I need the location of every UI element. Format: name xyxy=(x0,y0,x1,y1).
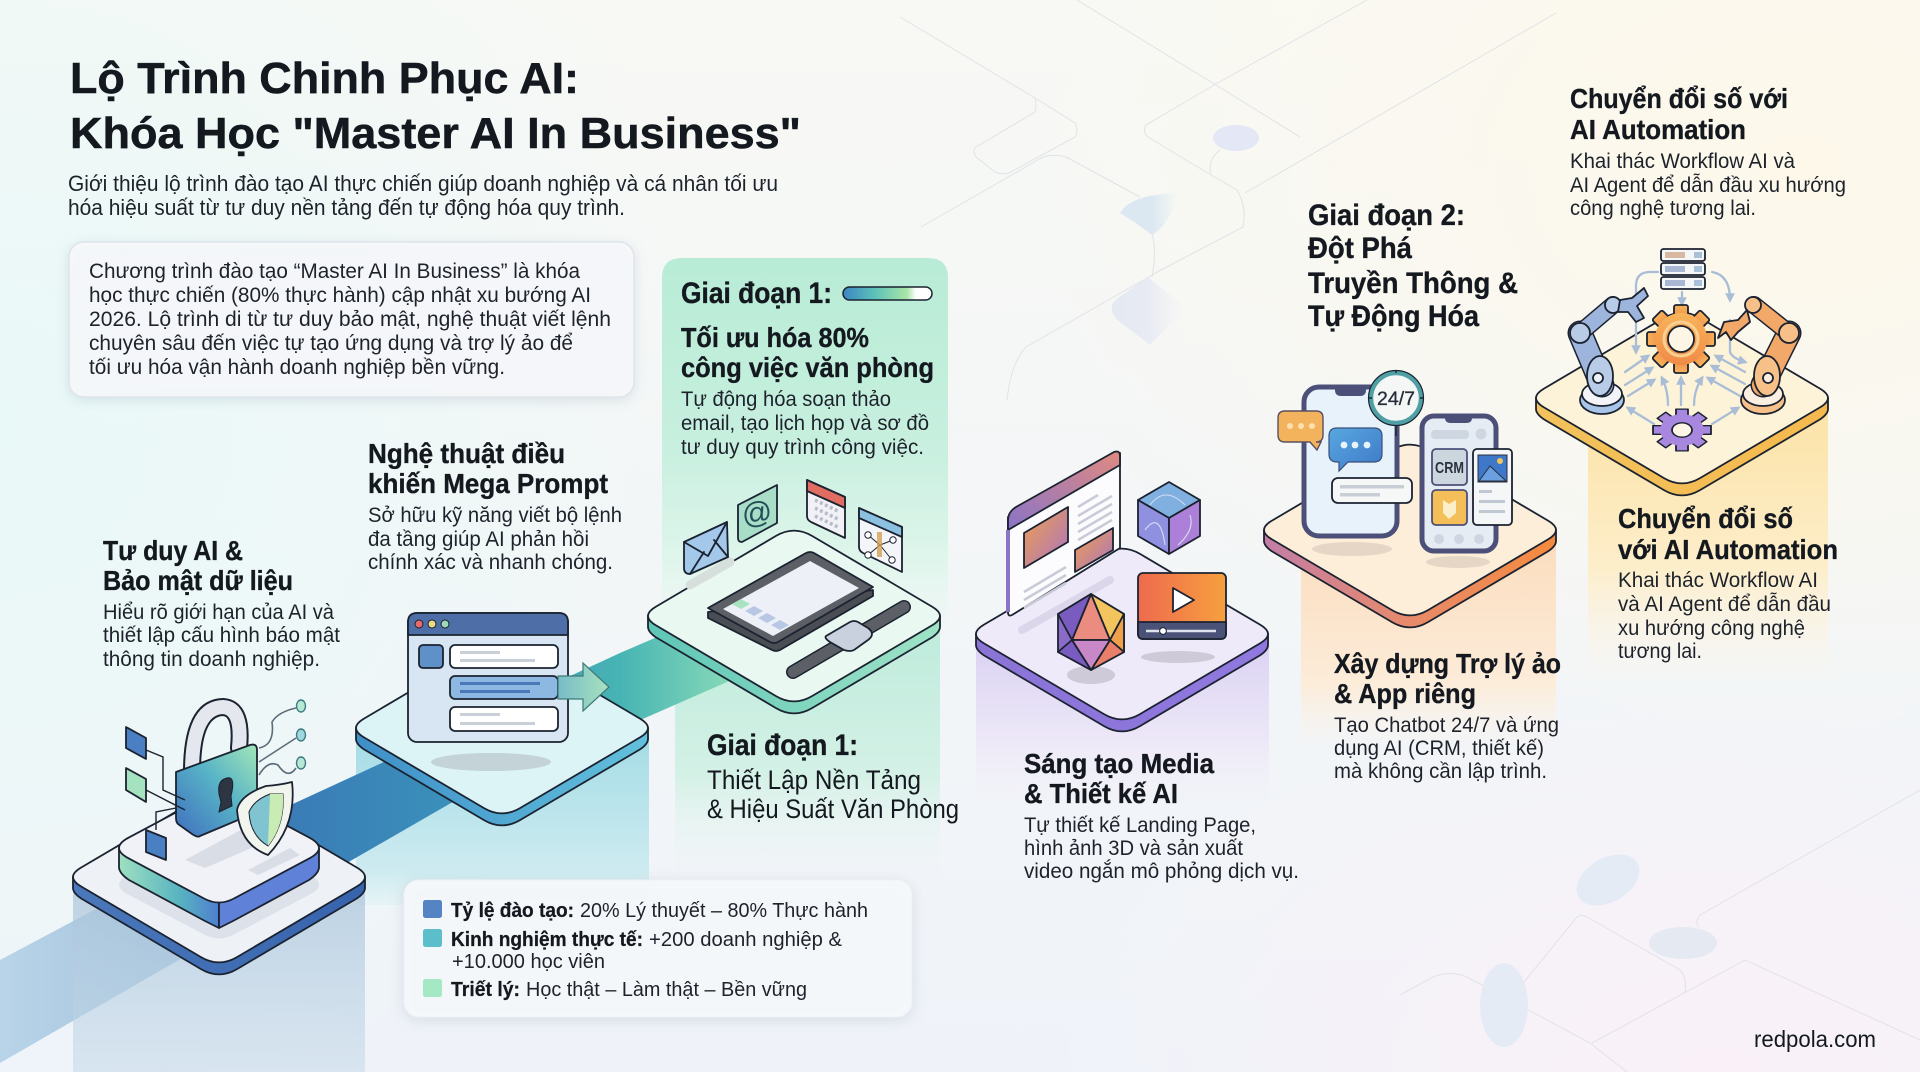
platform: office tablet xyxy=(648,531,940,713)
text: automation top block: Chuyển đổi số với xyxy=(1570,83,1788,114)
subtitle: hóa hiệu suất từ tư duy nền tảng đến tự động hóa quy trình. xyxy=(68,195,625,220)
heading: stage 1 optimise office work: Giai đoạn 1: xyxy=(681,277,832,310)
title xyxy=(70,54,801,158)
diagonal progress ribbon xyxy=(0,610,760,1063)
icon: blue robot arm xyxy=(1570,288,1648,414)
text: automation top block: công nghệ tương lai. xyxy=(1570,197,1756,220)
column: chatbot xyxy=(1301,530,1556,750)
website credit: redpola.com xyxy=(1754,1026,1876,1052)
text: security step: thông tin doanh nghiệp. xyxy=(103,648,320,671)
text: stage 1 foundation: & Hiệu Suất Văn Phòng xyxy=(707,794,959,824)
text: stage 1 foundation xyxy=(707,729,959,824)
legend item: philosophy: Học thật – Làm thật – Bền vững xyxy=(526,979,807,1001)
icon: phones, chat bubbles and 24/7 clock xyxy=(1278,370,1512,568)
text: security step: thiết lập cấu hình báo mật xyxy=(103,624,340,647)
text: stage 2 heading xyxy=(1308,199,1518,333)
text: automation top block: AI Agent để dẫn đầu xu hướng xyxy=(1570,174,1846,197)
text: security step: Tư duy AI & xyxy=(103,535,243,566)
text: automation top block: AI Automation xyxy=(1570,114,1746,145)
column: media xyxy=(976,634,1269,820)
text: stage 1 foundation: Giai đoạn 1: xyxy=(707,729,858,762)
text: media step: video ngắn mô phỏng dịch vụ. xyxy=(1024,860,1299,883)
icon: phones, chat bubbles and 24/7 clock: 24/7 xyxy=(1377,389,1415,410)
text: automation lower block: xu hướng công nghệ xyxy=(1618,617,1805,640)
title: Lộ Trình Chinh Phục AI: xyxy=(70,54,579,103)
text: virtual assistant step: Xây dựng Trợ lý ảo xyxy=(1334,648,1561,679)
icon: landing page, cube, gem and video xyxy=(1008,452,1226,684)
heading: stage 1 optimise office work: tư duy quy trình công việc. xyxy=(681,436,924,459)
text: media step: Tự thiết kế Landing Page, xyxy=(1024,814,1256,837)
text: virtual assistant step xyxy=(1334,648,1561,783)
text: automation lower block: Chuyển đổi số xyxy=(1618,503,1793,534)
platform: security xyxy=(73,792,365,974)
platform: mega prompt xyxy=(356,643,648,825)
text: stage 2 heading: Đột Phá xyxy=(1308,232,1412,265)
background circuit pattern xyxy=(900,0,1920,1072)
text: security step: Bảo mật dữ liệu xyxy=(103,565,293,596)
text: automation lower block: Khai thác Workflow AI xyxy=(1618,569,1818,592)
text: prompt step: Sở hữu kỹ năng viết bộ lệnh xyxy=(368,504,622,527)
text: media step: & Thiết kế AI xyxy=(1024,778,1178,809)
icon: tablet, watch and office apps: @ xyxy=(740,495,774,532)
legend item: training ratio xyxy=(423,900,868,922)
panel: legend card xyxy=(404,880,912,1017)
heading: stage 1 optimise office work: email, tạo lịch họp và sơ đồ xyxy=(681,412,929,435)
legend item: training ratio: 20% Lý thuyết – 80% Thực hành xyxy=(580,900,868,922)
panel: program intro card: học thực chiến (80% thực hành) cập nhật xu bướng AI xyxy=(89,284,591,307)
text: stage 2 heading: Giai đoạn 2: xyxy=(1308,199,1465,232)
text: media step xyxy=(1024,748,1299,883)
text: automation top block xyxy=(1570,83,1846,220)
subtitle xyxy=(68,171,778,220)
panel: program intro card: tối ưu hóa vận hành doanh nghiệp bền vững. xyxy=(89,356,505,379)
heading: stage 1 optimise office work: công việc văn phòng xyxy=(681,352,934,383)
column: security xyxy=(73,885,365,1072)
text: media step: Sáng tạo Media xyxy=(1024,748,1214,779)
legend item: experience xyxy=(423,929,843,973)
text: security step xyxy=(103,535,340,671)
legend item: experience: +200 doanh nghiệp & xyxy=(649,929,843,951)
text: prompt step: đa tầng giúp AI phản hồi xyxy=(368,528,589,551)
column: automation xyxy=(1588,398,1828,685)
text: stage 2 heading: Truyền Thông & xyxy=(1308,267,1518,300)
legend item: experience: Kinh nghiệm thực tế: xyxy=(451,929,643,951)
text: virtual assistant step: & App riêng xyxy=(1334,678,1476,709)
panel: program intro card xyxy=(69,242,634,397)
icon: phones, chat bubbles and 24/7 clock: CRM xyxy=(1435,460,1464,477)
platform: media xyxy=(976,549,1268,731)
text: stage 2 heading: Tự Động Hóa xyxy=(1308,300,1479,333)
legend item: training ratio: Tỷ lệ đào tạo: xyxy=(451,900,574,922)
text: prompt step: chính xác và nhanh chóng. xyxy=(368,551,613,574)
column: mega prompt xyxy=(356,735,649,905)
panel: program intro card: 2026. Lộ trình di từ tư duy bảo mật, nghệ thuật viết lệnh xyxy=(89,308,611,331)
text: virtual assistant step: dụng AI (CRM, thiết kế) xyxy=(1334,737,1544,760)
text: security step: Hiểu rõ giới hạn của AI và xyxy=(103,601,334,624)
icon: orange robot arm xyxy=(1718,297,1799,414)
platform: chatbot xyxy=(1264,445,1556,627)
legend item: experience: +10.000 học viên xyxy=(452,951,605,973)
text: virtual assistant step: mà không cần lập trình. xyxy=(1334,760,1547,783)
heading: stage 1 optimise office work xyxy=(681,277,934,459)
text: media step: hình ảnh 3D và sản xuất xyxy=(1024,837,1243,860)
legend item: philosophy: Triết lý: xyxy=(451,979,520,1001)
heading: stage 1 optimise office work: Tối ưu hóa 80% xyxy=(681,322,869,353)
panel: program intro card: chuyên sâu đến việc tự tạo ứng dụng và trợ lý ảo để xyxy=(89,332,573,355)
text: prompt step: Nghệ thuật điều xyxy=(368,438,565,469)
text: automation lower block: với AI Automation xyxy=(1618,534,1838,565)
icon: padlock and shield xyxy=(119,700,319,938)
panel: stage 1 green highlight xyxy=(662,258,948,640)
text: automation lower block xyxy=(1618,503,1838,663)
text: prompt step xyxy=(368,438,622,574)
icon: prompt window with arrow xyxy=(408,613,609,771)
text: automation lower block: và AI Agent để dẫn đầu xyxy=(1618,593,1831,616)
column: tablet xyxy=(675,618,940,880)
heading: stage 1 optimise office work: Tự động hóa soạn thảo xyxy=(681,388,891,411)
text: automation top block: Khai thác Workflow AI và xyxy=(1570,150,1795,173)
text: prompt step: khiến Mega Prompt xyxy=(368,468,608,499)
icon: tablet, watch and office apps xyxy=(684,480,904,672)
text: virtual assistant step: Tạo Chatbot 24/7 và ứng xyxy=(1334,714,1559,737)
text: automation lower block: tương lai. xyxy=(1618,640,1702,663)
icon: robot arms, gears and server xyxy=(1570,249,1799,451)
text: stage 1 foundation: Thiết Lập Nền Tảng xyxy=(707,765,921,795)
title: Khóa Học "Master AI In Business" xyxy=(70,109,801,158)
platform: automation xyxy=(1536,313,1828,495)
panel: program intro card: Chương trình đào tạo “Master AI In Business” là khóa xyxy=(89,260,580,283)
subtitle: Giới thiệu lộ trình đào tạo AI thực chiến giúp doanh nghiệp và cá nhân tối ưu xyxy=(68,171,778,196)
